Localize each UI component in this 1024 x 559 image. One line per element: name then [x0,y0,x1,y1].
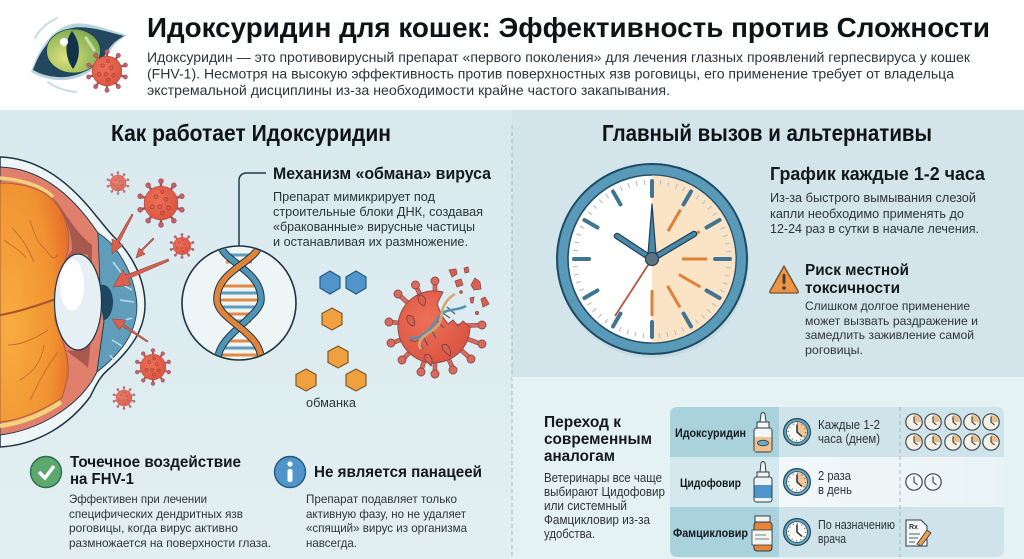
arrows: virus attack [112,214,169,342]
row: famciclovir: врача [818,532,846,546]
row: famciclovir [670,507,1004,557]
text block: transition to modern analogs [544,414,665,541]
text block: targeted action: Точечное воздействие [70,454,241,471]
text block: local toxicity: Слишком долгое применение [805,299,970,313]
panel: challenge background [512,110,1024,378]
text block: local toxicity: токсичности [805,280,900,297]
row: idoxuridine: Идоксуридин [675,428,746,440]
text block: local toxicity [805,262,978,357]
icon: prescription [906,520,931,546]
text block: targeted action [69,454,271,550]
row: cidofovir: в день [818,483,852,497]
table: comparison of drugs [670,407,1004,557]
text block: mechanism: Препарат мимикрирует под [273,190,436,204]
row: idoxuridine [670,407,1004,457]
intro text: Идоксуридин — это противовирусный препарат «первого поколения» для лечения глазных проявлений герпесвируса у кошек [147,49,971,65]
text block: transition to modern analogs: удобства. [544,527,595,541]
text block: mechanism: Механизм «обмана» вируса [273,164,491,183]
text block: mechanism: строительные блоки ДНК, создавая [273,205,483,219]
row: idoxuridine: Каждые 1-2 [818,418,880,432]
intro text: экстремальной дисциплины из-за необходимости крайне частого закапывания. [147,82,670,98]
text block: not a panacea: Не является панацеей [314,464,482,481]
text block: not a panacea: активную фазу, но не удаляет [306,507,466,521]
callout line: mechanism [239,173,266,246]
text block: targeted action: на FHV-1 [70,471,134,488]
text block: schedule: График каждые 1-2 часа [770,164,986,184]
text block: transition to modern analogs: аналогам [544,448,615,465]
text block: transition to modern analogs: выбирают Цидофовир [544,485,665,499]
text block: schedule: капли необходимо применять до [770,207,964,221]
label: decoy: обманка [306,396,356,410]
text block: targeted action: специфических дендритных язв [69,507,243,521]
text block: targeted action: размножается на поверхности глаза. [69,536,271,550]
illustration: broken virus with DNA [385,267,489,378]
panel: header [0,0,1024,110]
icon: eye drops bottle [754,412,772,452]
icon: pill bottle [752,516,772,551]
row: famciclovir: По назначению [818,518,895,532]
text block: local toxicity: может вызвать раздражение и [805,314,978,328]
text block: schedule [770,164,986,236]
text block: targeted action: роговицы, когда вирус активно [69,521,238,535]
row: famciclovir: Фамцикловир [673,528,748,540]
text block: transition to modern analogs: Переход к [544,414,622,431]
text block: mechanism [273,164,491,249]
intro text: (FHV-1). Несмотря на высокую эффективность против поверхностных язв роговицы, его применение требует от владельца [147,66,954,82]
icons: orange decoy hexagons [296,308,366,391]
icon: ten small clocks [906,414,999,450]
text block: mechanism: «бракованные» вирусные частицы [273,220,475,234]
text block: not a panacea: навсегда. [306,536,357,550]
row: idoxuridine: часа (днем) [818,432,880,446]
panel: how it works background [0,110,512,559]
title: Идоксуридин для кошек: Эффективность против Сложности [147,12,990,43]
text block: targeted action: Эффективен при лечении [69,492,207,506]
intro text [147,49,971,98]
panel: alternatives background [512,378,1024,559]
illustration: eye cross-section [0,157,145,447]
icon: info [274,456,306,488]
text block: transition to modern analogs: Ветеринары все чаще [544,471,662,485]
heading: main challenge: Главный вызов и альтернативы [602,120,932,146]
text block: schedule: 12-24 раз в сутки в начале лечения. [770,222,979,236]
text block: local toxicity: Риск местной [805,262,909,279]
text block: transition to modern analogs: Фамцикловир из-за [544,513,650,527]
row: cidofovir: 2 раза [818,469,851,483]
illustration: DNA in circle [182,240,296,360]
text block: local toxicity: роговицы. [805,343,863,357]
chart: clock [557,164,749,358]
text block: transition to modern analogs: современным [544,431,652,448]
icon: cat eye with virus [31,18,128,92]
row: cidofovir: Цидофовир [680,478,741,490]
icon: blue drops bottle [754,462,772,502]
icon: green check [30,456,62,488]
icon: viruses around eye [107,171,194,410]
icon: prescription: Rx [909,524,918,531]
text block: not a panacea: Препарат подавляет только [306,492,457,506]
text block: transition to modern analogs: или системный [544,499,627,513]
heading: how it works: Как работает Идоксуридин [111,120,391,146]
row: cidofovir [670,457,1004,507]
icon: two small clocks [906,474,941,490]
text block: local toxicity: замедлить заживление самой [805,328,974,342]
text block: not a panacea: «спящий» вирус из организма [306,521,467,535]
text block: schedule: Из-за быстрого вымывания слезой [770,191,976,205]
icon: warning triangle [770,266,798,293]
icons: blue nucleotide hexagons [320,271,366,294]
text block: not a panacea [306,464,482,550]
text block: mechanism: и останавливая их размножение. [273,235,468,249]
